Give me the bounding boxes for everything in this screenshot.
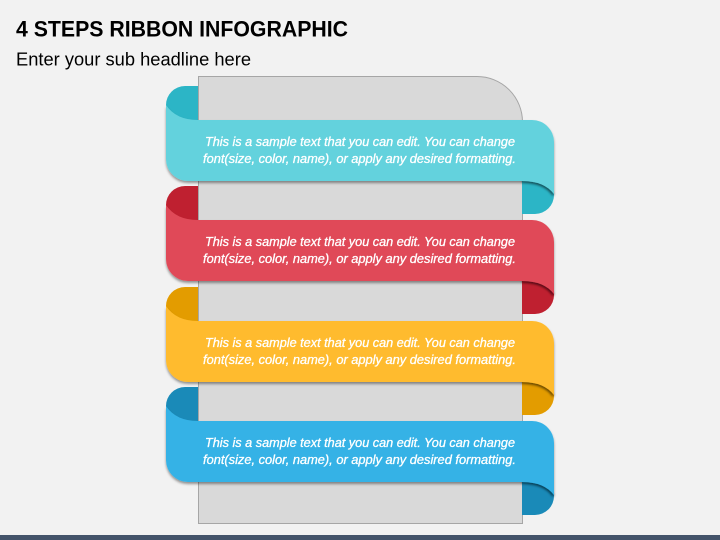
ribbon text: [203, 336, 516, 367]
ribbon text: This is a sample text that you can edit. You can change: [205, 436, 515, 450]
left fold: [166, 186, 198, 225]
ribbon text: font(size, color, name), or apply any desired formatting.: [203, 353, 516, 367]
left fold: [166, 387, 198, 426]
ribbon text: This is a sample text that you can edit. You can change: [205, 336, 515, 350]
fold shadow: [522, 281, 553, 295]
ribbon text: This is a sample text that you can edit. You can change: [205, 135, 515, 149]
left fold: [166, 287, 198, 326]
right fold: [522, 275, 554, 314]
ribbon step 1: teal: [166, 86, 554, 214]
fold shadow: [522, 382, 553, 396]
ribbon band: [166, 306, 554, 395]
title: 4 STEPS RIBBON INFOGRAPHIC: [16, 16, 348, 42]
ribbon text: [203, 135, 516, 166]
right fold: [522, 376, 554, 415]
footer bar: [0, 535, 720, 540]
ribbon text: font(size, color, name), or apply any desired formatting.: [203, 453, 516, 467]
ribbon text: font(size, color, name), or apply any desired formatting.: [203, 152, 516, 166]
ribbon step 4: blue: [166, 387, 554, 515]
right fold: [522, 476, 554, 515]
ribbon step 3: yellow: [166, 287, 554, 415]
centre grey panel: [198, 76, 522, 524]
fold shadow: [522, 482, 553, 496]
right fold: [522, 175, 554, 214]
ribbon text: [203, 436, 516, 467]
left fold: [166, 86, 198, 125]
ribbon text: This is a sample text that you can edit. You can change: [205, 235, 515, 249]
subtitle: Enter your sub headline here: [16, 50, 251, 70]
ribbon step 2: red: [166, 186, 554, 314]
ribbon text: font(size, color, name), or apply any desired formatting.: [203, 252, 516, 266]
ribbon band: [166, 105, 554, 194]
ribbon band: [166, 406, 554, 495]
ribbon text: [203, 235, 516, 266]
fold shadow: [522, 181, 553, 195]
ribbon band: [166, 205, 554, 294]
